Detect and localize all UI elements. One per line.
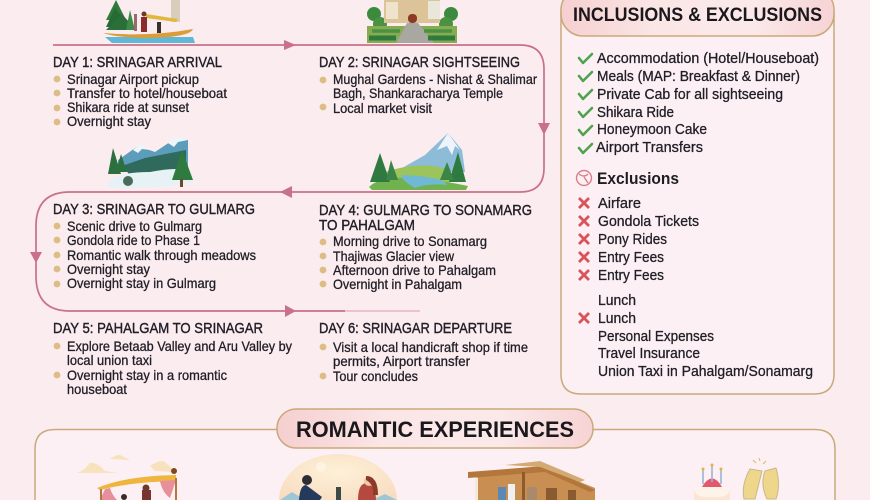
list: exclusions with cross marks: Gondola Tickets — [598, 213, 699, 230]
list: exclusions with cross marks: Personal Expenses — [598, 328, 714, 345]
heading and bullets: day 3: Overnight stay in Gulmarg — [67, 275, 216, 291]
panel: inclusions and exclusions — [561, 0, 834, 394]
heading and bullets: day 6 — [319, 320, 528, 384]
list: exclusions with cross marks: Lunch — [598, 310, 636, 327]
list: exclusions with cross marks: Entry Fees — [598, 249, 664, 266]
heading and bullets: day 5 — [53, 320, 292, 397]
heading and bullets: day 3: Overnight stay — [67, 261, 150, 277]
heading and bullets: day 4: Thajiwas Glacier view — [333, 248, 455, 264]
icon: shikara on Dal Lake — [103, 0, 195, 43]
heading and bullets: day 2: Bagh, Shankaracharya Temple — [333, 85, 503, 101]
heading and bullets: day 2: Mughal Gardens - Nishat & Shalimar — [333, 71, 537, 87]
heading: exclusions: Exclusions — [597, 169, 679, 188]
heading and bullets: day 4: Overnight in Pahalgam — [333, 276, 462, 292]
heading pill: romantic experiences — [277, 409, 593, 448]
heading and bullets: day 3: Scenic drive to Gulmarg — [67, 218, 202, 234]
heading and bullets: day 4: Morning drive to Sonamarg — [333, 233, 487, 249]
list: exclusions with cross marks: Pony Rides — [598, 231, 667, 248]
list: exclusions with cross marks: Lunch — [598, 292, 636, 309]
heading and bullets: day 2: Local market visit — [333, 100, 432, 116]
icon: Mughal garden — [367, 0, 458, 43]
heading and bullets: day 3: DAY 3: SRINAGAR TO GULMARG — [53, 201, 255, 218]
heading and bullets: day 3 — [53, 201, 256, 291]
heading pill: romantic experiences: ROMANTIC EXPERIENCES — [296, 417, 574, 442]
heading pill: inclusions and exclusions — [561, 0, 834, 36]
heading and bullets: day 5: Overnight stay in a romantic — [67, 367, 227, 383]
heading pill: inclusions and exclusions: INCLUSIONS & EXCLUSIONS — [573, 5, 822, 26]
list: inclusions with check marks: Meals (MAP: Breakfast & Dinner) — [597, 68, 800, 85]
heading and bullets: day 4: Afternoon drive to Pahalgam — [333, 262, 496, 278]
list: inclusions with check marks: Accommodation (Hotel/Houseboat) — [597, 50, 819, 67]
panel: romantic experiences — [35, 409, 835, 500]
heading and bullets: day 1: Shikara ride at sunset — [67, 99, 189, 115]
list: exclusions with cross marks: Travel Insurance — [598, 345, 700, 362]
heading and bullets: day 6: Tour concludes — [333, 368, 418, 384]
heading and bullets: day 1: DAY 1: SRINAGAR ARRIVAL — [53, 54, 222, 71]
list: inclusions with check marks: Shikara Ride — [597, 104, 674, 121]
icon: Gulmarg snowy mountains — [107, 137, 193, 188]
heading and bullets: day 6: DAY 6: SRINAGAR DEPARTURE — [319, 320, 512, 337]
icon: Sonamarg valley and river — [369, 133, 468, 190]
heading and bullets: day 4 — [319, 202, 532, 292]
heading and bullets: day 6: Visit a local handicraft shop if time — [333, 339, 528, 355]
list: inclusions with check marks: Private Cab for all sightseeing — [597, 86, 783, 103]
heading and bullets: day 2: DAY 2: SRINAGAR SIGHTSEEING — [319, 54, 520, 71]
heading and bullets: day 1: Srinagar Airport pickup — [67, 71, 199, 87]
icon: romantic dinner — [279, 454, 397, 500]
heading and bullets: day 5: houseboat — [67, 381, 127, 397]
icon: shikara ride with couple — [77, 455, 177, 500]
heading and bullets: day 5: DAY 5: PAHALGAM TO SRINAGAR — [53, 320, 263, 337]
list: exclusions with cross marks — [579, 195, 813, 380]
heading and bullets: day 3: Romantic walk through meadows — [67, 247, 256, 263]
list: inclusions with check marks: Airport Transfers — [596, 139, 703, 156]
list: inclusions with check marks: Honeymoon Cake — [597, 121, 707, 138]
list: exclusions with cross marks: Union Taxi in Pahalgam/Sonamarg — [598, 363, 813, 380]
heading and bullets: day 6: permits, Airport transfer — [333, 353, 470, 369]
heading and bullets: day 3: Gondola ride to Phase 1 — [67, 232, 200, 248]
list: inclusions with check marks — [579, 50, 819, 156]
heading and bullets: day 5: local union taxi — [67, 352, 152, 368]
heading and bullets: day 2 — [319, 54, 537, 116]
heading and bullets: day 4: DAY 4: GULMARG TO SONAMARG — [319, 202, 532, 219]
heading and bullets: day 1: Transfer to hotel/houseboat — [67, 85, 227, 101]
icon: honeymoon cake and champagne flutes — [694, 458, 778, 500]
heading and bullets: day 1 — [53, 54, 227, 129]
heading and bullets: day 1: Overnight stay — [67, 113, 151, 129]
icon: exclusions symbol — [576, 170, 592, 186]
list: exclusions with cross marks: Airfare — [598, 195, 641, 212]
list: exclusions with cross marks: Entry Fees — [598, 267, 664, 284]
heading and bullets: day 4: TO PAHALGAM — [319, 217, 415, 234]
route line with arrows — [30, 40, 550, 317]
heading and bullets: day 5: Explore Betaab Valley and Aru Valley by — [67, 338, 292, 354]
icon: houseboat — [468, 461, 595, 500]
